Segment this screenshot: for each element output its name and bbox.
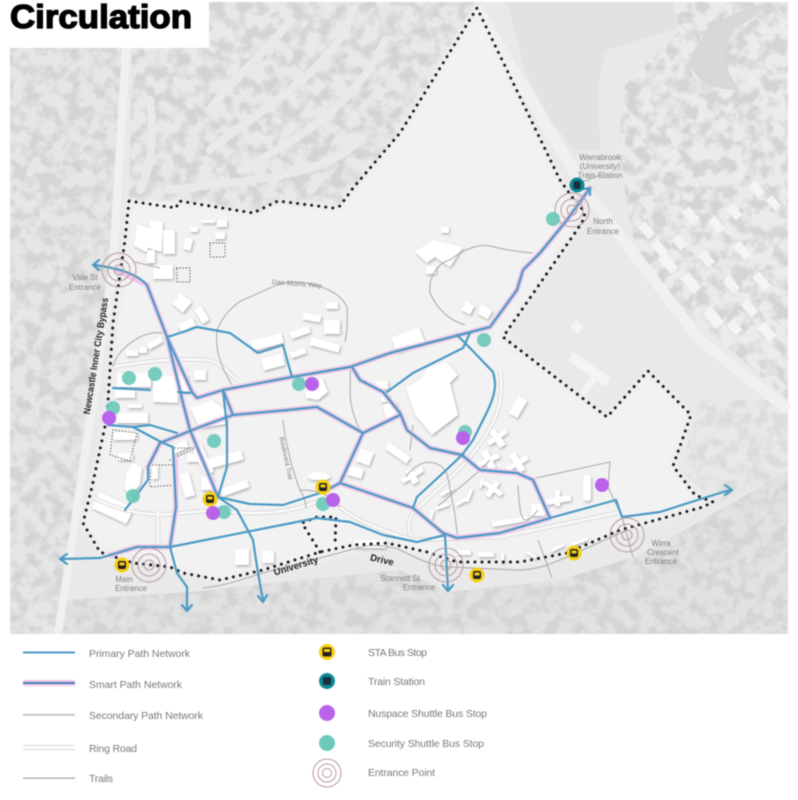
primary path network [62, 188, 730, 610]
legend: entrance point [313, 759, 435, 787]
legend: ring road [23, 743, 137, 755]
STA bus stops [114, 480, 582, 582]
map labels: Entrance [587, 227, 620, 236]
security shuttle bus stops [106, 212, 560, 519]
legend: smart path network: Smart Path Network [89, 679, 183, 691]
map labels: Dan Morris Way [272, 279, 323, 290]
map labels: North [593, 217, 613, 226]
map labels: (University) [580, 162, 621, 171]
map labels: Entrance [645, 557, 678, 566]
golf course texture [129, 2, 475, 213]
map labels: Entrance [403, 583, 436, 592]
map labels: University [273, 554, 320, 578]
map labels: Drive [369, 552, 395, 569]
legend: STA bus stop [319, 644, 427, 660]
smart path network [110, 188, 590, 555]
legend: primary path network: Primary Path Network [89, 648, 191, 660]
site boundary [83, 8, 713, 580]
campus ground [83, 8, 713, 582]
buildings [92, 220, 591, 565]
nuspace shuttle bus stops [102, 377, 609, 520]
proposed building outlines [110, 243, 225, 487]
map labels: Wirra [651, 539, 671, 548]
map labels [69, 153, 680, 593]
water body [507, 2, 678, 150]
east residential texture [618, 2, 788, 400]
legend: trails: Trails [89, 773, 113, 785]
map labels: Crescent [647, 548, 680, 557]
south east bushland [680, 400, 788, 505]
inlet water [690, 2, 770, 90]
south residential and bushland texture [55, 470, 788, 634]
entrance point rings on map [102, 193, 644, 582]
map labels: Main [115, 575, 133, 584]
icon: train station [570, 178, 584, 192]
map labels: Train Station [577, 171, 623, 180]
legend: secondary path network: Secondary Path Network [89, 710, 204, 722]
legend: ring road: Ring Road [89, 743, 137, 755]
bypass and rail corridors [58, 8, 788, 634]
legend: security shuttle bus stop: Security Shuttle Bus Stop [368, 738, 484, 750]
legend: smart path network [23, 679, 183, 691]
legend: trails [23, 773, 113, 785]
map labels: Entrance [115, 584, 148, 593]
legend: train station: Train Station [368, 676, 425, 688]
map labels: Newcastle Inner City Bypass [82, 297, 111, 415]
legend: entrance point: Entrance Point [368, 767, 435, 779]
legend: train station [319, 673, 425, 689]
map labels: Warrabrook [579, 153, 622, 162]
arrowheads [60, 188, 732, 611]
map labels: Entrance [69, 283, 102, 292]
legend: STA bus stop: STA Bus Stop [368, 647, 427, 659]
west suburb texture [10, 48, 122, 634]
ring road [93, 359, 617, 548]
legend: nuspace shuttle bus stop: Nuspace Shuttle Bus Stop [368, 708, 487, 720]
buildings: north east industrial and residential [568, 180, 781, 397]
legend: security shuttle bus stop [319, 735, 484, 751]
map labels: Stannett St [380, 574, 421, 583]
map labels: Boulevard Trail [278, 436, 294, 481]
map labels: Vale St [72, 273, 98, 282]
panel: legend [23, 644, 487, 787]
secondary paths and trails [113, 175, 633, 588]
legend: nuspace shuttle bus stop [319, 705, 487, 721]
panel: aerial base map [10, 2, 788, 634]
panel: title box [0, 0, 209, 48]
